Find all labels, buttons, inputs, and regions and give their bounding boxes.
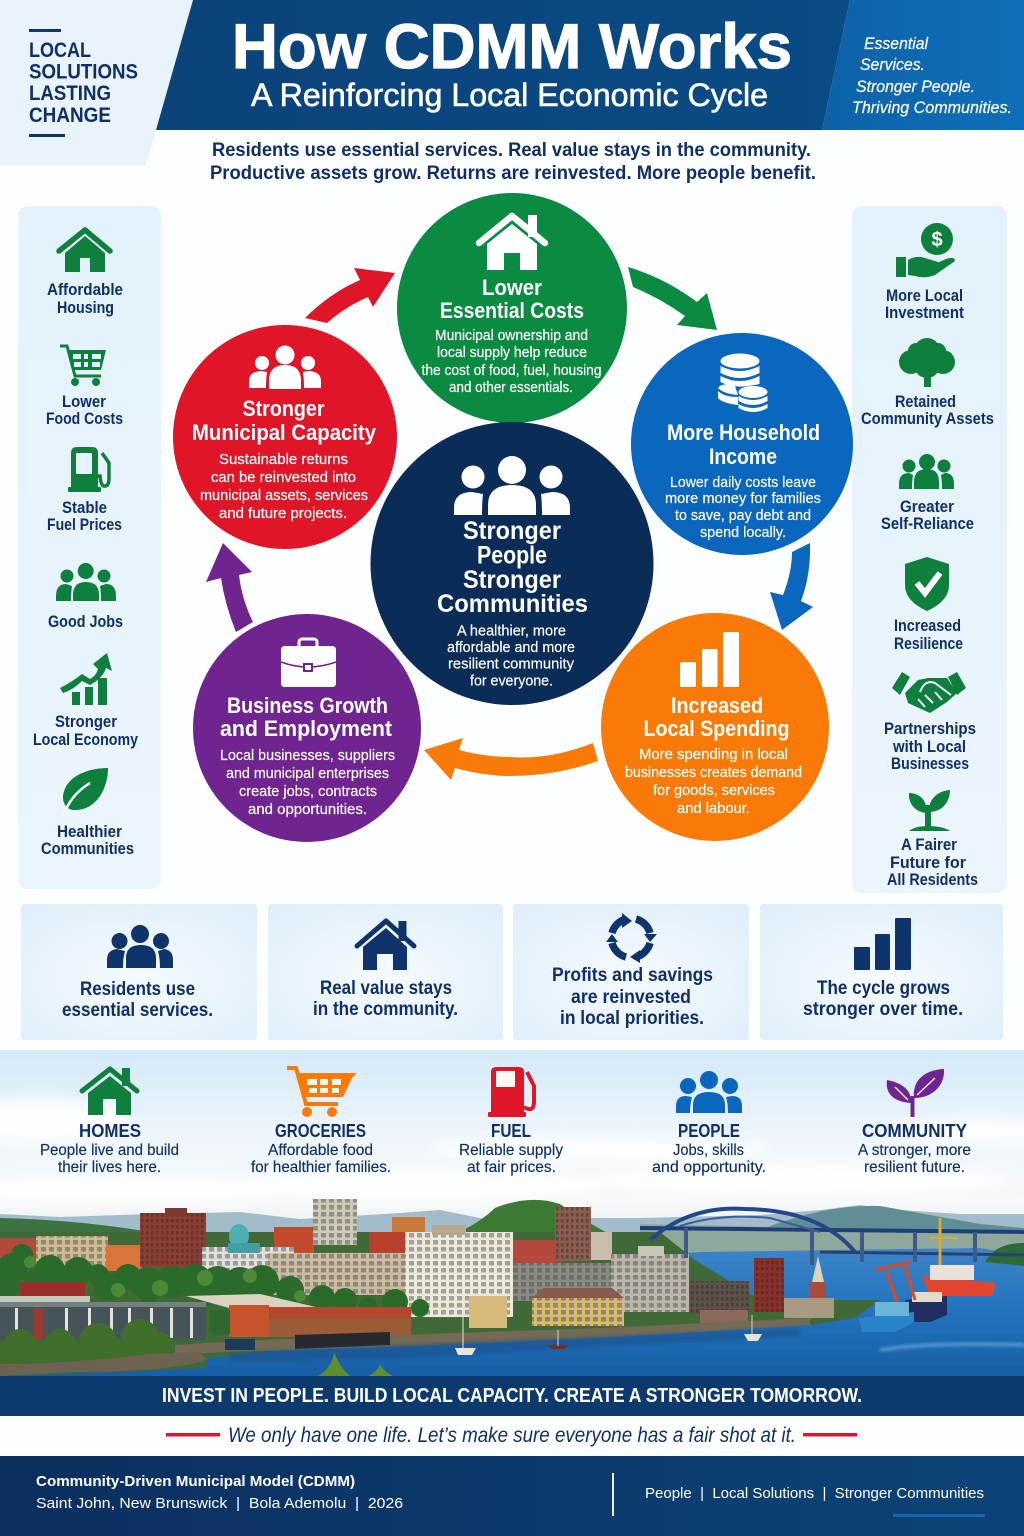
icon: house — [479, 215, 545, 270]
text block: create jobs, contracts — [239, 784, 377, 800]
item: groceries — [251, 1068, 391, 1176]
label: greater self-reliance: Self-Reliance — [881, 515, 974, 533]
island trees — [0, 1319, 173, 1368]
label: in the community. — [313, 998, 458, 1020]
label: increased resilience — [894, 617, 963, 653]
heading — [644, 693, 790, 741]
text block: Lower daily costs leave — [670, 475, 816, 491]
icon: sprout — [909, 790, 950, 831]
heading: Business Growth — [227, 693, 388, 718]
panel: city scene with sky — [0, 1050, 1024, 1376]
heading — [440, 275, 584, 323]
distant mountains — [0, 1205, 1024, 1252]
icon: handshake — [892, 672, 966, 713]
far shore — [640, 1224, 1024, 1256]
sailboats — [455, 1315, 762, 1355]
item: community — [858, 1069, 971, 1176]
icon: tree — [899, 338, 955, 387]
text block: municipal assets, services — [200, 488, 368, 504]
text block: local supply help reduce — [437, 345, 587, 361]
item: people: and opportunity. — [652, 1159, 766, 1176]
item: community: A stronger, more — [858, 1142, 971, 1159]
banner: call to action: INVEST IN PEOPLE. BUILD LOCAL CAPACITY. CREATE A STRONGER TOMORROW. — [162, 1385, 862, 1407]
panel: stronger municipal capacity — [173, 325, 397, 549]
heading — [667, 420, 820, 469]
text block — [665, 475, 821, 541]
item: people: PEOPLE — [678, 1120, 740, 1141]
text block: and other essentials. — [449, 380, 573, 396]
heading: and Employment — [220, 716, 393, 741]
icon: cycle arrows — [606, 913, 657, 963]
label: healthier communities: Healthier — [57, 823, 123, 841]
text block: Local businesses, suppliers — [220, 748, 395, 764]
footer right tagline: People | Local Solutions | Stronger Communities — [645, 1485, 984, 1502]
label: more local investment: More Local — [886, 287, 963, 305]
label — [313, 977, 458, 1020]
icon: coins — [718, 354, 768, 412]
label: stronger local economy: Local Economy — [33, 731, 139, 749]
panel: left tagline: CHANGE — [29, 104, 111, 127]
arrow: green to blue — [628, 267, 717, 330]
item: community: resilient future. — [864, 1159, 965, 1176]
heading: Lower — [482, 275, 542, 300]
icon: hand with coin — [896, 223, 955, 277]
image: harbour city skyline — [0, 1199, 1024, 1376]
panel: right slogan banner: Services. — [860, 55, 925, 74]
text block: More spending in local — [639, 747, 788, 763]
quote line: We only have one life. Let’s make sure everyone has a fair shot at it. — [228, 1424, 796, 1447]
forest hill — [430, 1200, 625, 1242]
steel arch bridge — [640, 1209, 1024, 1265]
heading — [192, 396, 377, 445]
back row — [513, 1263, 613, 1301]
panel: left tagline: LOCAL — [29, 39, 91, 62]
panel: business growth and employment — [193, 614, 421, 842]
tall cream building — [405, 1232, 513, 1317]
text block: and future projects. — [219, 506, 347, 522]
panel: increased local spending — [601, 613, 829, 841]
label: retained community assets — [861, 393, 994, 428]
icon: people, good jobs — [56, 563, 116, 601]
icon: shopping cart — [60, 346, 106, 386]
text block: the cost of food, fuel, housing — [422, 363, 602, 379]
label: healthier communities — [41, 823, 134, 858]
label: affordable housing: Housing — [57, 299, 114, 317]
label — [803, 977, 963, 1020]
heading — [220, 693, 393, 741]
label: Profits and savings — [552, 964, 713, 986]
panel: stronger people stronger communities — [370, 422, 654, 705]
heading: More Household — [667, 420, 820, 445]
icon: hand with coin: $ — [931, 229, 943, 251]
icon: house, affordable housing — [59, 230, 110, 272]
icon: bar chart — [680, 632, 739, 687]
label: retained community assets: Retained — [895, 393, 956, 411]
footer left credits — [36, 1473, 403, 1512]
label: greater self-reliance — [881, 498, 974, 533]
intro text — [210, 139, 816, 184]
blue ship — [859, 1302, 914, 1332]
panel: right slogan banner: Essential — [864, 34, 929, 53]
label: greater self-reliance: Greater — [900, 498, 955, 516]
label: increased resilience: Increased — [894, 617, 961, 635]
icon: bar chart — [854, 918, 911, 970]
subtitle: A Reinforcing Local Economic Cycle — [251, 77, 768, 113]
label: partnerships with local businesses: Partnerships — [884, 720, 976, 738]
label: more local investment: Investment — [885, 304, 964, 322]
panel: title banner — [156, 0, 850, 130]
grey building — [611, 1254, 689, 1312]
foreground foliage — [318, 1352, 393, 1376]
brick tower — [140, 1213, 206, 1267]
footer — [0, 1456, 1024, 1536]
icon: people, self-reliance — [899, 454, 954, 489]
footer left credits: Community-Driven Municipal Model (CDMM) — [36, 1473, 355, 1490]
footer left credits: Saint John, New Brunswick | Bola Ademolu | 2026 — [36, 1495, 403, 1512]
red ship — [922, 1218, 996, 1296]
item: homes: their lives here. — [58, 1159, 161, 1176]
text block: can be reinvested into — [211, 470, 356, 486]
panel: right benefits — [852, 206, 1007, 893]
panel: real value stays — [268, 904, 503, 1040]
heading: Stronger — [463, 517, 561, 545]
heading: Increased — [671, 693, 763, 718]
arrow: red to green — [305, 268, 395, 323]
mid-rise row — [268, 1253, 405, 1295]
label: lower food costs: Food Costs — [46, 410, 123, 428]
panel: left tagline: LASTING — [29, 82, 111, 105]
heading: Stronger — [463, 566, 561, 594]
intro text: Productive assets grow. Returns are reinvested. More people benefit. — [210, 162, 816, 184]
panel: lower essential costs — [397, 193, 627, 423]
panel: right slogan banner — [822, 0, 1024, 130]
header band — [0, 0, 1024, 165]
label: essential services. — [62, 999, 213, 1021]
icon: leaf — [63, 768, 108, 817]
item: homes: HOMES — [79, 1120, 141, 1141]
label — [62, 978, 213, 1021]
water — [0, 1248, 1024, 1376]
text block — [447, 624, 575, 690]
label: increased resilience: Resilience — [894, 635, 963, 653]
panel: residents use essential services — [21, 904, 257, 1040]
heading: Local Spending — [644, 716, 790, 741]
water reflections — [230, 1328, 800, 1362]
label: partnerships with local businesses: with Local — [892, 738, 966, 756]
panel: more household income — [631, 333, 853, 555]
water highlights — [880, 1344, 1024, 1350]
white domed building — [202, 1247, 294, 1275]
heading: Income — [709, 444, 777, 469]
heading: Communities — [437, 590, 588, 618]
item: people: Jobs, skills — [673, 1142, 744, 1159]
icon: briefcase — [281, 639, 336, 687]
text block: Sustainable returns — [219, 452, 348, 468]
intro text: Residents use essential services. Real value stays in the community. — [212, 139, 811, 161]
label: are reinvested — [571, 986, 691, 1008]
item: fuel: Reliable supply — [459, 1142, 563, 1159]
label: lower food costs: Lower — [62, 393, 107, 411]
label: a fairer future for all residents: Future for — [890, 854, 967, 872]
label: partnerships with local businesses — [884, 720, 976, 773]
label: a fairer future for all residents — [887, 836, 978, 889]
city land — [0, 1232, 880, 1376]
quay wall — [175, 1318, 810, 1354]
label: good jobs: Good Jobs — [48, 613, 123, 631]
label — [552, 964, 713, 1029]
arrow: orange to purple — [424, 738, 598, 780]
panel: profits and savings — [513, 904, 749, 1040]
panel: the cycle grows — [760, 904, 1003, 1040]
label: a fairer future for all residents: A Fairer — [901, 836, 958, 854]
text block — [422, 328, 602, 396]
icon: people — [454, 456, 570, 515]
label: stable fuel prices: Fuel Prices — [47, 516, 122, 534]
text block: more money for families — [665, 491, 821, 507]
label: Real value stays — [320, 977, 452, 999]
text block: to save, pay debt and — [675, 508, 811, 524]
text block — [200, 452, 368, 522]
heading: Municipal Capacity — [192, 420, 377, 445]
item: groceries: Affordable food — [268, 1142, 373, 1159]
icon: shield with check — [905, 557, 949, 611]
text block: Municipal ownership and — [435, 328, 588, 344]
left mixed buildings — [0, 1238, 48, 1263]
trees behind waterfront — [0, 1244, 429, 1317]
text block: for everyone. — [470, 674, 553, 690]
label: affordable housing: Affordable — [47, 281, 123, 299]
panel: icon row — [40, 1067, 971, 1176]
arrow: purple to red — [206, 543, 253, 632]
label: healthier communities: Communities — [41, 840, 134, 858]
text block — [220, 748, 395, 818]
item: fuel: FUEL — [491, 1120, 531, 1141]
label: stronger local economy: Stronger — [55, 713, 118, 731]
red-orange waterfront building — [186, 1294, 320, 1308]
heading: Essential Costs — [440, 298, 584, 323]
title: How CDMM Works — [232, 12, 792, 82]
item: fuel: at fair prices. — [467, 1159, 556, 1176]
arrow: blue to orange — [770, 543, 813, 630]
text block — [625, 747, 802, 817]
panel: left benefits — [18, 206, 161, 889]
item: community: COMMUNITY — [862, 1120, 968, 1141]
icon: fuel pump — [68, 447, 109, 492]
yellow building — [532, 1298, 624, 1326]
panel: right slogan banner: Thriving Communities. — [852, 98, 1012, 117]
lower left red building — [20, 1282, 85, 1298]
item: homes: People live and build — [40, 1142, 179, 1159]
label: retained community assets: Community Assets — [861, 410, 994, 428]
label: stronger over time. — [803, 998, 963, 1020]
label: lower food costs — [46, 393, 123, 428]
icon: growth chart — [60, 653, 112, 705]
glass tower — [313, 1199, 357, 1245]
label: a fairer future for all residents: All Residents — [887, 871, 978, 889]
item: homes — [40, 1068, 179, 1176]
banner: call to action — [0, 1376, 1024, 1416]
label: affordable housing — [47, 281, 123, 317]
brown tower — [555, 1207, 591, 1261]
icon: house — [357, 921, 414, 970]
dark building — [689, 1281, 749, 1314]
navy ship and crane — [875, 1262, 947, 1322]
long grey building — [0, 1296, 90, 1304]
panel: right slogan banner: Stronger People. — [856, 77, 975, 96]
text block: spend locally. — [700, 525, 786, 541]
panel: left tagline: SOLUTIONS — [29, 60, 138, 84]
clock tower — [810, 1282, 826, 1312]
label: Residents use — [80, 978, 195, 1000]
item: groceries: for healthier families. — [251, 1159, 391, 1176]
text block: resilient community — [448, 656, 575, 672]
text block: businesses creates demand — [625, 765, 802, 781]
text block: affordable and more — [447, 640, 575, 656]
heading: People — [477, 542, 547, 570]
label: in local priorities. — [560, 1007, 704, 1029]
background colourful roofs — [274, 1217, 612, 1266]
text block: and labour. — [677, 801, 750, 817]
item: people — [652, 1071, 766, 1176]
text block: for goods, services — [653, 783, 775, 799]
label: stable fuel prices — [47, 499, 122, 534]
text block: and municipal enterprises — [226, 766, 389, 782]
label: more local investment — [885, 287, 964, 322]
label: partnerships with local businesses: Businesses — [891, 755, 969, 773]
heading: Stronger — [242, 396, 325, 421]
red tower — [754, 1258, 784, 1312]
quote line — [0, 1416, 1024, 1456]
label: stronger local economy — [33, 713, 139, 749]
label: stable fuel prices: Stable — [62, 499, 107, 517]
item: fuel — [459, 1067, 563, 1176]
text block: and opportunities. — [248, 802, 367, 818]
item: groceries: GROCERIES — [275, 1120, 366, 1141]
icon: people — [107, 925, 173, 968]
heading — [437, 517, 588, 618]
text block: A healthier, more — [457, 624, 566, 640]
island rocks — [0, 1352, 207, 1376]
icon: people — [249, 346, 321, 389]
panel: left tagline — [0, 0, 193, 165]
label: The cycle grows — [817, 977, 950, 999]
